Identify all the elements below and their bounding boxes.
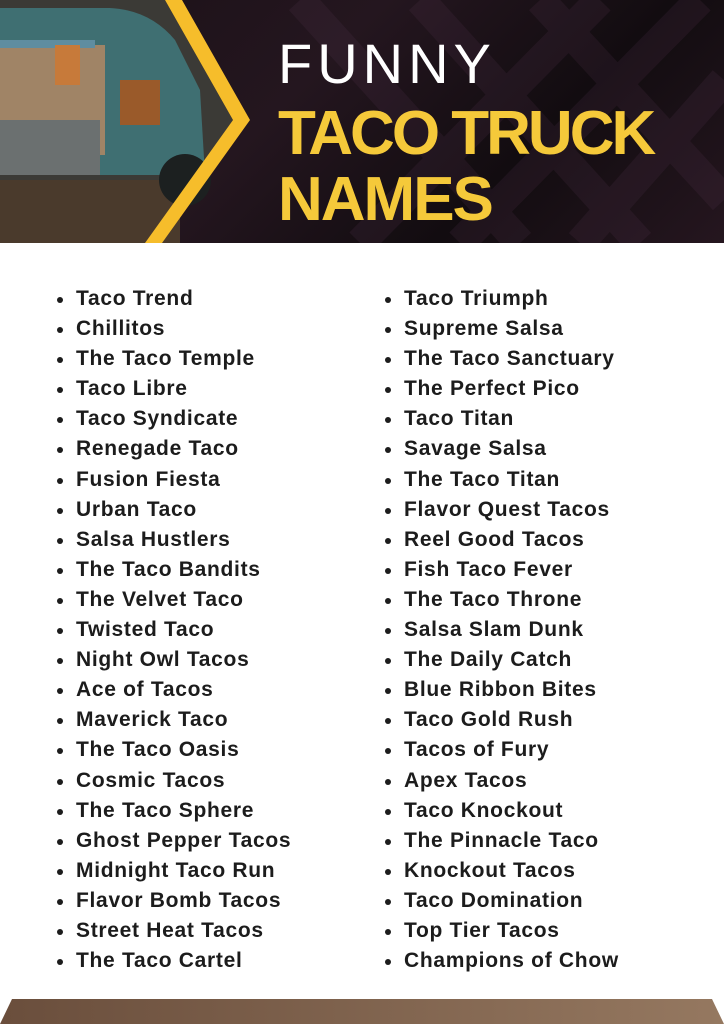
list: right column: The Daily Catch [404,648,572,671]
list: left column: Ghost Pepper Tacos [76,829,291,852]
footer bar [0,999,724,1024]
list: right column [385,287,619,972]
list: left column: Fusion Fiesta [76,468,220,491]
list: right column: Reel Good Tacos [404,528,584,551]
list: left column: Twisted Taco [76,618,214,641]
list: left column: The Taco Cartel [76,949,242,972]
list: left column: Urban Taco [76,498,197,521]
list: left column: Taco Syndicate [76,407,238,430]
list: right column: The Taco Sanctuary [404,347,615,370]
list: left column: Street Heat Tacos [76,919,264,942]
list: left column: Taco Libre [76,377,188,400]
list: left column [57,287,291,972]
header banner: TACO TRUCK [278,99,653,168]
list: right column: Champions of Chow [404,949,619,972]
list: left column: Night Owl Tacos [76,648,249,671]
list: right column: Fish Taco Fever [404,558,573,581]
list: right column: Taco Triumph [404,287,549,310]
list: right column: Knockout Tacos [404,859,576,882]
list: left column: The Taco Sphere [76,799,254,822]
title [278,32,656,234]
list: right column: Flavor Quest Tacos [404,498,610,521]
list: left column: The Taco Bandits [76,558,261,581]
yellow chevron [145,0,250,243]
list: right column: Blue Ribbon Bites [404,678,597,701]
header banner: FUNNY [278,32,496,95]
list: left column: Salsa Hustlers [76,528,231,551]
list: left column: Taco Trend [76,287,193,310]
list: left column: Ace of Tacos [76,678,214,701]
list: left column: Maverick Taco [76,708,228,731]
list: left column: The Taco Temple [76,347,255,370]
list: right column: Apex Tacos [404,768,527,792]
list: right column: The Perfect Pico [404,377,580,400]
header banner: NAMES [278,165,492,234]
list: left column: Midnight Taco Run [76,859,275,882]
list: right column: The Taco Throne [404,588,582,611]
truck photo [0,0,233,243]
list: left column: Flavor Bomb Tacos [76,889,281,912]
list: right column: Supreme Salsa [404,317,564,340]
list: right column: Taco Titan [404,407,514,430]
list: left column: The Velvet Taco [76,588,244,611]
list: left column: Chillitos [76,317,165,340]
list: left column: The Taco Oasis [76,738,239,761]
header banner [0,0,724,243]
list: right column: Savage Salsa [404,437,547,460]
list: right column: Top Tier Tacos [404,919,560,942]
list: right column: Taco Gold Rush [404,708,573,731]
list: left column: Cosmic Tacos [76,768,225,792]
list: right column: Tacos of Fury [404,738,549,761]
list: left column: Renegade Taco [76,437,239,460]
list: right column: Salsa Slam Dunk [404,618,584,641]
list: right column: Taco Domination [404,889,583,912]
list: right column: The Pinnacle Taco [404,829,599,852]
list: right column: Taco Knockout [404,799,563,822]
list: right column: The Taco Titan [404,468,560,491]
